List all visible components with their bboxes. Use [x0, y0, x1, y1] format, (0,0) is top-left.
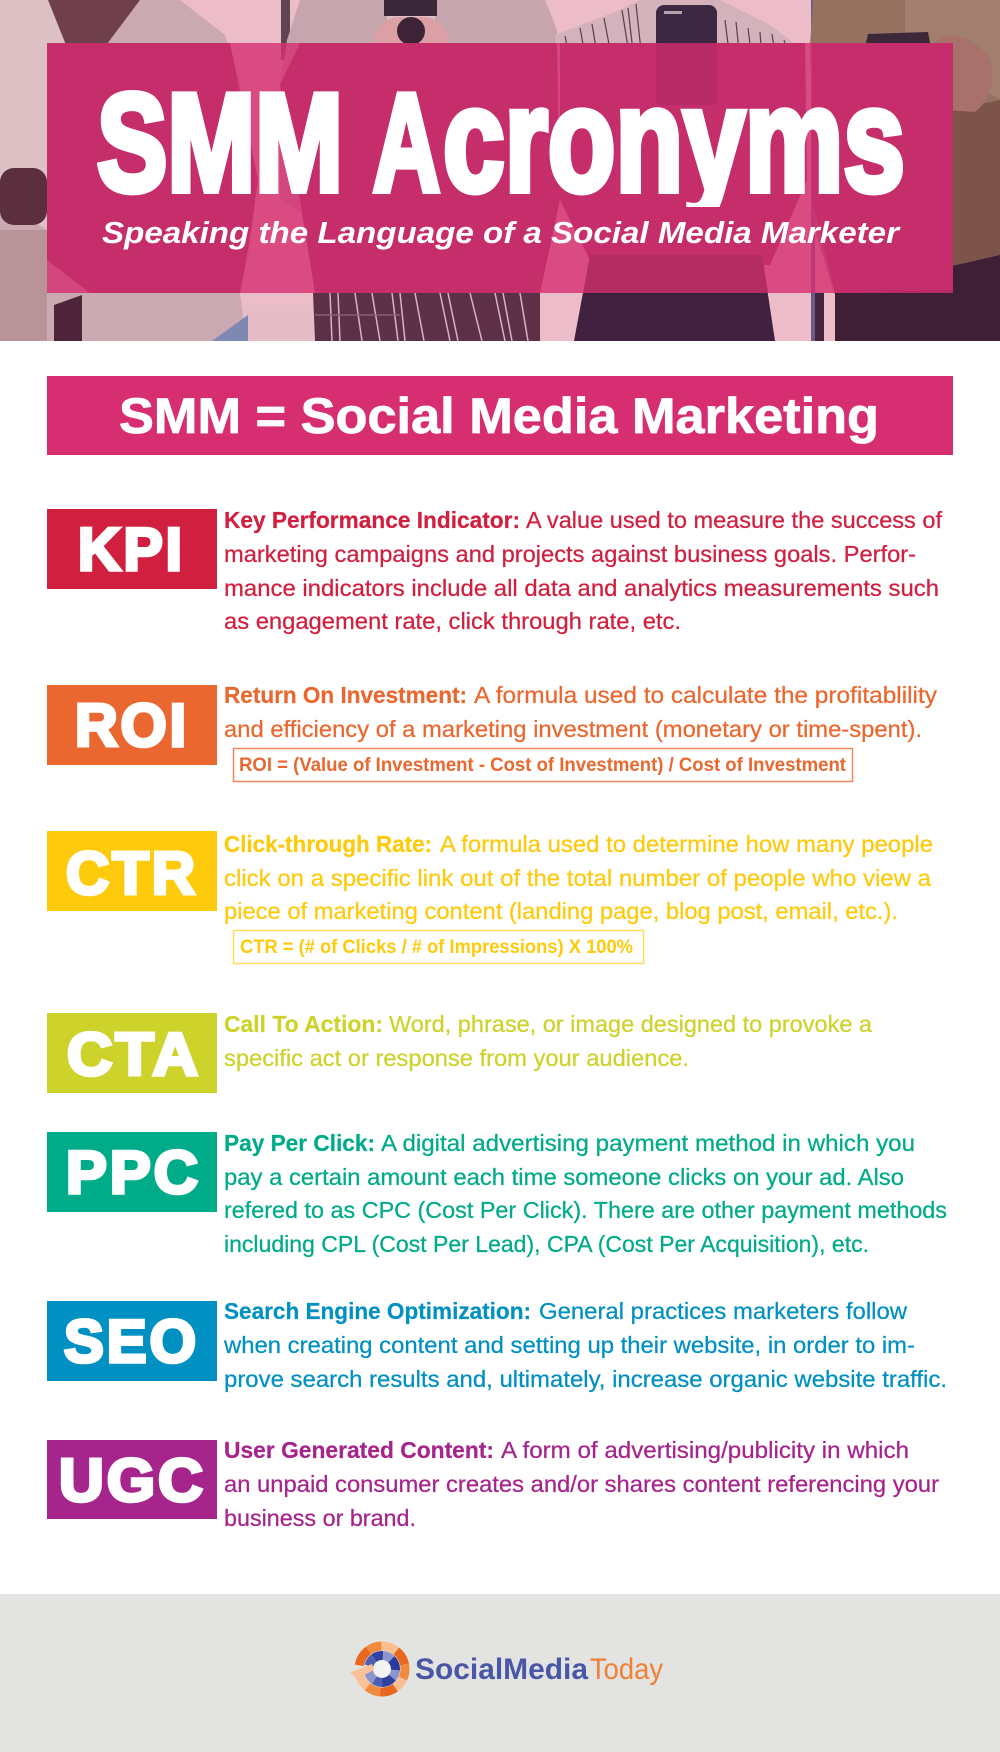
SEO definition: General practices marketers follow: [539, 1298, 907, 1324]
ROI badge: ROI: [75, 692, 189, 759]
PPC definition: [224, 1130, 947, 1257]
ROI definition: and efficiency of a marketing investment (monetary or time-spent).: [224, 716, 922, 742]
CTA badge: CTA: [67, 1021, 201, 1088]
CTR definition: piece of marketing content (landing page, blog post, email, etc.).: [224, 898, 898, 924]
KPI badge: [47, 509, 217, 589]
darker body silhouettes seen through the banner: [47, 43, 953, 293]
UGC definition: [224, 1437, 939, 1531]
logo wordmark: Today: [590, 1653, 663, 1686]
SEO definition: prove search results and, ultimately, increase organic website traffic.: [224, 1366, 947, 1392]
PPC definition: including CPL (Cost Per Lead), CPA (Cost Per Acquisition), etc.: [224, 1231, 869, 1257]
PPC entry: [47, 1130, 947, 1257]
ROI definition: A formula used to calculate the profitablility: [474, 682, 938, 708]
footer: [0, 1594, 1000, 1752]
KPI definition: mance indicators include all data and analytics measurements such: [224, 575, 939, 601]
UGC definition: an unpaid consumer creates and/or shares content referencing your: [224, 1471, 939, 1497]
CTA badge: [47, 1013, 217, 1093]
subtitle: Speaking the Language of a Social Media Marketer: [102, 215, 901, 250]
UGC definition: User Generated Content:: [224, 1437, 494, 1463]
title banner: [47, 43, 953, 293]
ROI definition: [224, 682, 938, 742]
CTA definition: Call To Action:: [224, 1011, 383, 1037]
CTR badge: [47, 831, 217, 911]
main title: A: [373, 66, 440, 220]
CTR definition: A formula used to determine how many people: [440, 831, 933, 857]
ROI formula box: [234, 748, 852, 782]
CTR definition: [224, 831, 933, 924]
CTA entry: [47, 1011, 872, 1093]
pole behind person 2: [281, 0, 290, 60]
PPC badge: [47, 1132, 217, 1212]
SEO definition: Search Engine Optimization:: [224, 1298, 531, 1324]
CTR badge: CTR: [66, 840, 198, 907]
CTA definition: [224, 1011, 872, 1071]
KPI definition: [224, 507, 943, 634]
SMM definition bar: SMM = Social Media Marketing: [119, 388, 879, 444]
CTR formula box: CTR = (# of Clicks / # of Impressions) X 100%: [240, 937, 633, 958]
KPI definition: A value used to measure the success of: [526, 507, 943, 533]
PPC definition: refered to as CPC (Cost Per Click). There are other payment methods: [224, 1197, 947, 1223]
ROI badge: [47, 685, 217, 765]
PPC definition: A digital advertising payment method in which you: [381, 1130, 915, 1156]
PPC definition: pay a certain amount each time someone clicks on your ad. Also: [224, 1164, 904, 1190]
KPI definition: marketing campaigns and projects against business goals. Perfor-: [224, 541, 916, 567]
CTR formula box: [234, 930, 644, 964]
icon: Social Media Today logo ring: [350, 1646, 405, 1692]
ROI formula box: ROI = (Value of Investment - Cost of Investment) / Cost of Investment: [239, 755, 847, 776]
hero photo: four people holding phones: [0, 0, 1000, 341]
person 1 shirt: [0, 0, 258, 341]
SEO definition: [223, 1298, 947, 1392]
SEO badge: SEO: [64, 1308, 199, 1375]
PPC definition: Pay Per Click:: [224, 1130, 375, 1156]
person 2 sweater: [280, 0, 560, 220]
UGC entry: [47, 1437, 939, 1531]
SEO badge: [47, 1301, 217, 1381]
SMM definition bar: [47, 376, 953, 455]
CTA definition: specific act or response from your audience.: [224, 1045, 689, 1071]
KPI entry: [47, 507, 943, 634]
main title: [96, 90, 904, 207]
UGC definition: A form of advertising/publicity in which: [501, 1437, 909, 1463]
CTR entry: [47, 831, 933, 964]
logo wordmark: [415, 1653, 663, 1686]
PPC badge: PPC: [66, 1139, 201, 1206]
person 4 jacket: [810, 0, 1000, 295]
SEO entry: [47, 1298, 947, 1392]
logo wordmark: SocialMedia: [415, 1653, 588, 1686]
SEO definition: when creating content and setting up their website, in order to im-: [223, 1332, 915, 1358]
main title: SMM: [97, 66, 343, 220]
UGC definition: business or brand.: [224, 1505, 416, 1531]
ROI definition: Return On Investment:: [224, 682, 467, 708]
KPI badge: KPI: [78, 516, 185, 583]
pole right: [811, 0, 815, 341]
KPI definition: as engagement rate, click through rate, etc.: [224, 608, 681, 634]
CTR definition: Click-through Rate:: [224, 831, 432, 857]
KPI definition: Key Performance Indicator:: [224, 507, 520, 533]
CTR definition: click on a specific link out of the total number of people who view a: [224, 865, 931, 891]
ROI entry: [47, 682, 938, 782]
person 3 blouse: [555, 0, 807, 265]
UGC badge: UGC: [59, 1447, 206, 1514]
CTA definition: Word, phrase, or image designed to provoke a: [389, 1011, 872, 1037]
